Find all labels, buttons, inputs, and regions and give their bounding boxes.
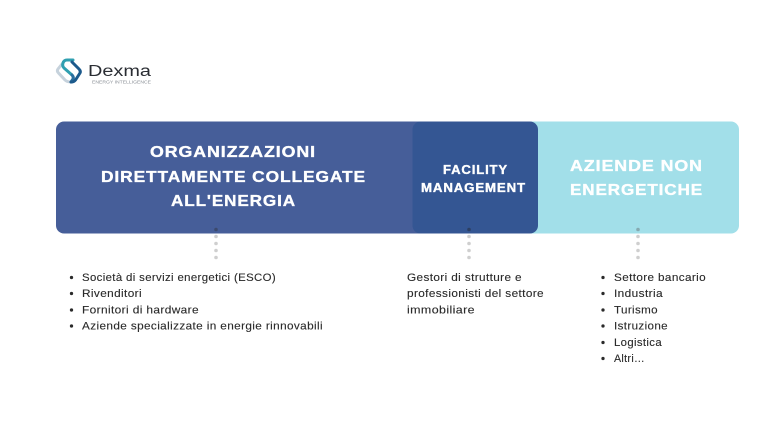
list: energy organisations: Rivenditori bbox=[82, 288, 142, 300]
heading: aziende non energetiche: AZIENDE NON bbox=[570, 158, 703, 175]
connector: dots left bbox=[214, 228, 218, 259]
connector: dots right bbox=[636, 228, 640, 259]
list: non-energy sectors: Altri… bbox=[614, 353, 645, 365]
heading: organizzazioni direttamente collegate all'energia bbox=[101, 144, 366, 210]
heading: aziende non energetiche bbox=[570, 158, 703, 199]
heading: facility management: MANAGEMENT bbox=[421, 181, 526, 195]
icon: logo mark bbox=[57, 60, 80, 82]
list: energy organisations: Aziende specializzate in energie rinnovabili bbox=[82, 320, 323, 332]
list: non-energy sectors: Settore bancario bbox=[614, 272, 706, 284]
list: non-energy sectors: Industria bbox=[614, 288, 664, 300]
heading: organizzazioni direttamente collegate all'energia: DIRETTAMENTE COLLEGATE bbox=[101, 169, 366, 186]
logo tagline: ENERGY INTELLIGENCE bbox=[92, 80, 151, 84]
heading: facility management: FACILITY bbox=[443, 163, 508, 177]
list: non-energy sectors: Istruzione bbox=[614, 320, 668, 332]
panel: aziende non energetiche bbox=[420, 122, 739, 234]
text: facility management description: Gestori di strutture e bbox=[407, 272, 522, 284]
list: non-energy sectors bbox=[601, 272, 706, 365]
heading: organizzazioni direttamente collegate all'energia: ALL'ENERGIA bbox=[171, 193, 296, 210]
connector: dots middle bbox=[467, 228, 471, 259]
text: facility management description bbox=[407, 272, 544, 316]
list: energy organisations: Fornitori di hardware bbox=[82, 304, 199, 316]
logo: Dexma bbox=[57, 60, 151, 84]
list: non-energy sectors: Logistica bbox=[614, 337, 663, 349]
heading: aziende non energetiche: ENERGETICHE bbox=[570, 182, 703, 199]
heading: organizzazioni direttamente collegate all'energia: ORGANIZZAZIONI bbox=[150, 144, 316, 161]
list: non-energy sectors: Turismo bbox=[614, 304, 658, 316]
heading: facility management bbox=[421, 163, 526, 195]
text: facility management description: professionisti del settore bbox=[407, 288, 544, 300]
text: facility management description: immobiliare bbox=[407, 304, 475, 316]
logo wordmark: Dexma bbox=[88, 63, 151, 80]
list: energy organisations bbox=[70, 272, 323, 332]
list: energy organisations: Società di servizi energetici (ESCO) bbox=[82, 272, 276, 284]
panel: organizzazioni direttamente collegate bbox=[56, 122, 456, 234]
panel: facility management bbox=[412, 122, 538, 234]
